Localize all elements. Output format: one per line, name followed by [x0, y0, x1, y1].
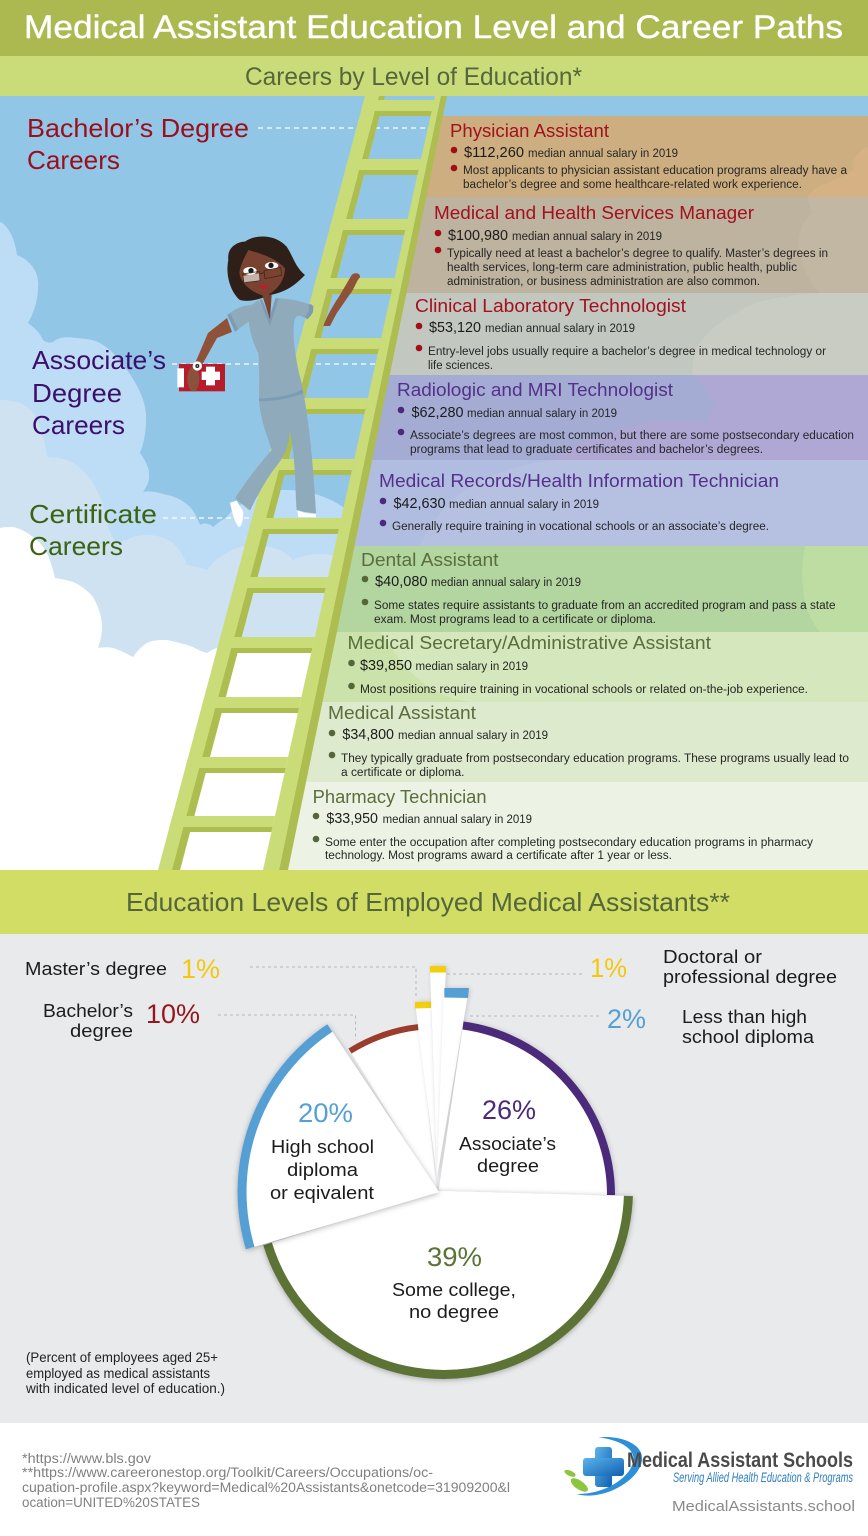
panel: Medical and Health Services Manager: [404, 197, 868, 293]
panel: Medical Records/Health Information Technician: $42,630: [394, 496, 446, 512]
callout: master's degree: [25, 954, 220, 984]
icon: head with hair and glasses: [227, 236, 305, 319]
panel: Radiologic and MRI Technologist: Radiologic and MRI Technologist: [397, 380, 673, 400]
callout: less than high school diploma: school diploma: [682, 1027, 815, 1047]
note: percent of employees: employed as medical assistants: [26, 1366, 210, 1381]
panel: Dental Assistant: exam. Most programs lead to a certificate or diploma.: [374, 614, 656, 626]
logo: Medical Assistant Schools: MedicalAssistants.school: [672, 1499, 855, 1515]
title: Medical Assistant Education Level and Career Paths: [24, 9, 843, 45]
section heading: education levels: Education Levels of Employed Medical Assistants**: [126, 887, 730, 917]
callout: doctoral or professional degree: Doctoral or: [663, 947, 762, 967]
panel: Medical Assistant: They typically graduate from postsecondary education programs. These programs usually lead to: [341, 753, 849, 765]
pants: [235, 393, 316, 513]
note: percent of employees: with indicated level of education.): [25, 1381, 225, 1396]
icon: shoes: [230, 501, 316, 527]
panel: Pharmacy Technician: Pharmacy Technician: [313, 787, 487, 807]
label: Associate's Degree Careers: Degree: [32, 378, 122, 408]
label: Bachelor's Degree Careers: Bachelor’s Degree: [27, 113, 249, 143]
panel: Medical Records/Health Information Technician: [352, 460, 868, 546]
callout: bachelor's degree: degree: [70, 1021, 133, 1041]
panel: Medical and Health Services Manager: Typically need at least a bachelor’s degree to qualify. Master’s degrees in: [447, 248, 828, 260]
value: 39% some college: 39%: [427, 1242, 482, 1272]
sources: *https://www.bls.gov: [22, 1451, 151, 1466]
icon: left arm: [195, 318, 232, 365]
sources: **https://www.careeronestop.org/Toolkit/Careers/Occupations/oc-: [22, 1465, 433, 1480]
panel: Pharmacy Technician: [286, 782, 868, 870]
panel: Clinical Laboratory Technologist: Clinical Laboratory Technologist: [415, 296, 686, 316]
panel: Dental Assistant: Dental Assistant: [361, 550, 498, 570]
panel: Medical Assistant: Medical Assistant: [328, 703, 476, 723]
panel: Physician Assistant: bachelor’s degree and some healthcare-related work experience.: [463, 179, 802, 191]
callout: less than high school diploma: [607, 1004, 815, 1047]
panel: Dental Assistant: median annual salary in 2019: [431, 577, 581, 589]
scrub top: [227, 298, 314, 401]
callout: master's degree: 1%: [181, 954, 220, 984]
logo: Medical Assistant Schools: [563, 1437, 855, 1515]
panel: Medical Records/Health Information Technician: Medical Records/Health Information Technician: [379, 471, 779, 491]
callout: bachelor's degree: Bachelor’s: [43, 1001, 133, 1021]
title banner: [0, 0, 868, 56]
panel: Radiologic and MRI Technologist: Associate’s degrees are most common, but there are some postsecondary education: [410, 430, 854, 442]
panel: Pharmacy Technician: Some enter the occupation after completing postsecondary education programs in pharmacy: [325, 837, 813, 849]
value: 20% high school: diploma: [287, 1160, 359, 1180]
value: 20% high school: High school: [271, 1137, 374, 1157]
panel: Clinical Laboratory Technologist: life sciences.: [428, 360, 493, 372]
panel: Medical and Health Services Manager: health services, long-term care administration, public health, public: [447, 262, 797, 274]
slice: less than high school 2%: [437, 988, 469, 1178]
callout: less than high school diploma: Less than high: [682, 1007, 807, 1027]
icon: leaves: [563, 1468, 590, 1494]
note: percent of employees: [25, 1350, 225, 1396]
panel: Medical Secretary/Administrative Assistant: $39,850: [360, 658, 412, 674]
label: Associate's Degree Careers: [32, 345, 375, 440]
value: 26% associate's: degree: [477, 1156, 539, 1176]
panel: Medical Records/Health Information Technician: median annual salary in 2019: [449, 499, 599, 511]
panel: Medical Secretary/Administrative Assistant: Most positions require training in vocational schools or related on-the-job experience.: [360, 684, 808, 696]
panel: Physician Assistant: $112,260: [464, 145, 524, 161]
panel: Medical and Health Services Manager: median annual salary in 2019: [512, 231, 662, 243]
panel: Radiologic and MRI Technologist: programs that lead to graduate certificates and bachelor’s degrees.: [410, 444, 763, 456]
value: 26% associate's: Associate’s: [459, 1134, 556, 1154]
section heading: education levels: [0, 870, 868, 934]
label: Certificate Careers: Certificate: [29, 499, 157, 529]
sky and clouds background: [0, 96, 868, 870]
value: 26% associate's: [459, 1095, 556, 1176]
panel: Pharmacy Technician: median annual salary in 2019: [383, 814, 532, 826]
callout: master's degree: Master’s degree: [25, 959, 167, 979]
panel: Clinical Laboratory Technologist: Entry-level jobs usually require a bachelor’s degree in medical technology or: [428, 346, 826, 358]
icon: medical bag: [177, 364, 225, 391]
panel: Radiologic and MRI Technologist: $62,280: [412, 405, 464, 421]
panel: Pharmacy Technician: $33,950: [326, 811, 378, 827]
ladder: [158, 96, 447, 870]
section heading: careers: [0, 56, 868, 96]
panel: Radiologic and MRI Technologist: median annual salary in 2019: [467, 408, 617, 420]
label: Bachelor's Degree Careers: [27, 113, 428, 175]
panel: Radiologic and MRI Technologist: [370, 375, 868, 460]
medical assistant climbing figure: [177, 236, 360, 527]
value: 39% some college: [392, 1242, 516, 1322]
callout: bachelor's degree: [43, 999, 200, 1041]
label: Bachelor's Degree Careers: Careers: [27, 145, 120, 175]
panel: Medical Secretary/Administrative Assistant: Medical Secretary/Administrative Assistant: [348, 633, 711, 653]
callout: doctoral or professional degree: professional degree: [663, 967, 837, 987]
value: 26% associate's: 26%: [482, 1095, 536, 1125]
pie chart: [242, 966, 628, 1374]
slice: associate's degree 26%: [438, 1026, 611, 1195]
panel: Clinical Laboratory Technologist: [387, 293, 868, 375]
panel: Clinical Laboratory Technologist: median annual salary in 2019: [485, 323, 635, 335]
sources: cupation-profile.aspx?keyword=Medical%20Assistants&onetcode=31909200&l: [22, 1480, 510, 1495]
section heading: careers: Careers by Level of Education*: [245, 63, 582, 91]
leader lines: [218, 967, 602, 1040]
icon: swoosh: [577, 1437, 642, 1496]
icon: right arm and hand: [323, 273, 360, 326]
slice: bachelor's degree 10%: [350, 1027, 437, 1192]
panel: Physician Assistant: [424, 116, 868, 197]
slice: high school diploma 20%: [242, 1028, 439, 1248]
label: Associate's Degree Careers: Associate’s: [32, 345, 166, 375]
label: Certificate Careers: Careers: [29, 531, 123, 561]
panel: Physician Assistant: Physician Assistant: [450, 121, 609, 141]
value: 20% high school: [270, 1098, 374, 1203]
slice: some college, no degree 39%: [268, 1191, 628, 1374]
panel: Medical Assistant: a certificate or diploma.: [341, 767, 464, 779]
slice: master's degree 1%: [415, 1002, 437, 1178]
panel: Medical Secretary/Administrative Assistant: [320, 632, 868, 702]
value: 20% high school: or eqivalent: [270, 1183, 374, 1203]
panel: Physician Assistant: median annual salary in 2019: [528, 148, 678, 160]
panel: Clinical Laboratory Technologist: $53,120: [429, 320, 481, 336]
panel: Medical Secretary/Administrative Assistant: median salary in 2019: [416, 661, 528, 673]
panel: Dental Assistant: [335, 546, 868, 632]
label: Certificate Careers: [29, 499, 253, 561]
value: 39% some college: no degree: [409, 1302, 499, 1322]
value: 20% high school: 20%: [298, 1098, 353, 1128]
sources: ocation=UNITED%20STATES: [22, 1495, 200, 1510]
panel: Medical and Health Services Manager: $100,980: [448, 228, 508, 244]
panel: Physician Assistant: Most applicants to physician assistant education programs already have a: [463, 165, 848, 177]
panel: Dental Assistant: $40,080: [375, 574, 428, 590]
icon: hand: [187, 367, 199, 391]
icon: watch: [193, 361, 202, 371]
value: 39% some college: Some college,: [392, 1280, 516, 1300]
callout: doctoral or professional degree: [590, 947, 837, 987]
panel: Dental Assistant: Some states require assistants to graduate from an accredited program and pass a state: [374, 600, 836, 612]
label: Associate's Degree Careers: Careers: [32, 410, 125, 440]
note: percent of employees: (Percent of employees aged 25+: [26, 1350, 218, 1365]
panel: Medical Assistant: [304, 702, 868, 782]
icon: cross: [583, 1447, 624, 1487]
panel: Medical and Health Services Manager: administration, or business administration are also common.: [447, 276, 760, 288]
slice: doctoral or professional degree 1%: [430, 966, 446, 1175]
panel: Medical Records/Health Information Technician: Generally require training in vocational schools or an associate’s degree.: [392, 521, 769, 533]
callout: doctoral or professional degree: 1%: [590, 953, 627, 983]
panel: Medical Assistant: median annual salary in 2019: [398, 730, 548, 742]
sources: [22, 1451, 510, 1510]
panel: Pharmacy Technician: technology. Most programs award a certificate after 1 year or less.: [325, 850, 672, 862]
gray chart background: [0, 934, 868, 1423]
callout: less than high school diploma: 2%: [607, 1004, 646, 1034]
panel: Medical and Health Services Manager: Medical and Health Services Manager: [434, 203, 754, 223]
callout: bachelor's degree: 10%: [146, 999, 200, 1029]
panel: Medical Assistant: $34,800: [342, 727, 394, 743]
